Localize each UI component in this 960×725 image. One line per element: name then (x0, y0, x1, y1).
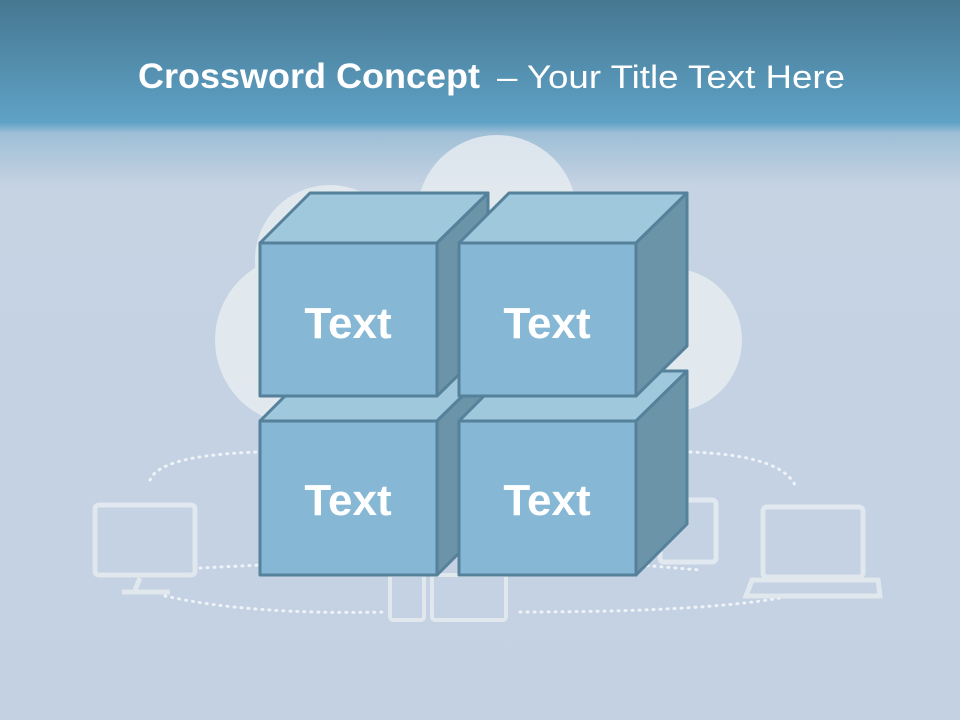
cube: top right: Text (503, 299, 591, 348)
title: Crossword Concept (138, 57, 480, 96)
cube: bottom right (459, 371, 687, 575)
cube: top left (260, 193, 488, 396)
cube: top right (459, 193, 687, 396)
dotted connector loops (150, 452, 795, 612)
cube: bottom right: Text (503, 476, 591, 525)
cube: top left: Text (304, 299, 392, 348)
cube: bottom left (260, 371, 488, 575)
icon: camera (660, 500, 716, 562)
cloud (215, 135, 742, 425)
icon: laptop (746, 507, 880, 596)
title (138, 57, 845, 96)
title: – Your Title Text Here (497, 59, 845, 95)
icon: phones (390, 575, 506, 620)
cube: bottom left: Text (304, 476, 392, 525)
icon: desktop monitor (95, 505, 195, 592)
